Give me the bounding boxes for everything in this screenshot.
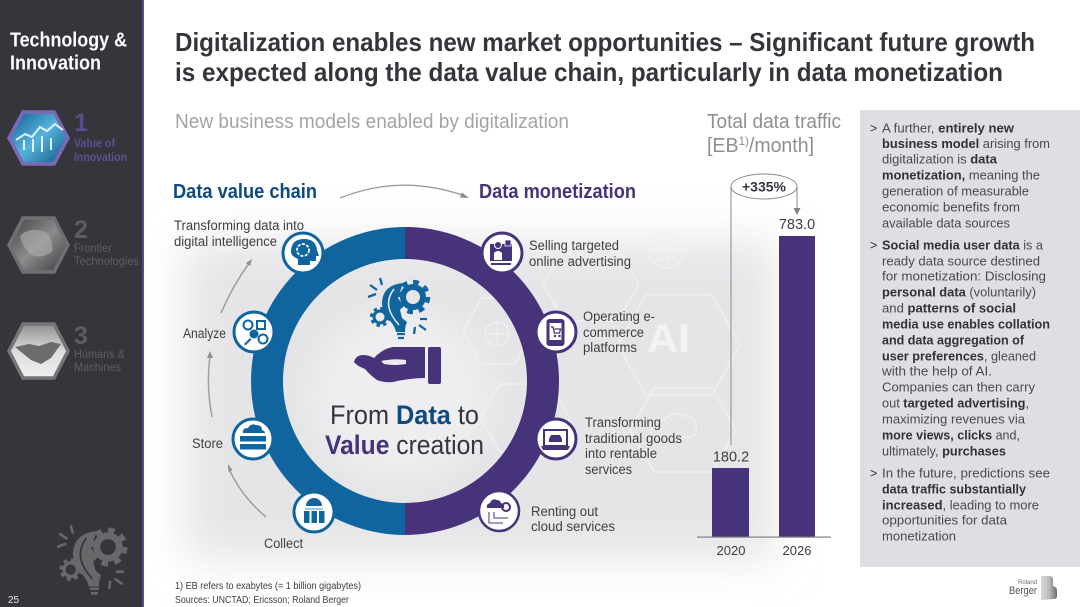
arrow: chain to monetization — [340, 185, 469, 198]
labels: value chain steps: Store — [192, 436, 223, 451]
icon: central bulb and gears — [354, 278, 441, 384]
bullet 2: ultimately, purchases — [882, 444, 1006, 458]
bullet 2: with the help of AI. — [881, 364, 992, 378]
labels: monetization routes: traditional goods — [585, 431, 682, 446]
bullet 2: personal data (voluntarily) — [882, 286, 1036, 300]
icon: central hand — [354, 347, 441, 384]
icon: rentable goods — [536, 419, 576, 459]
bullet 1: economic benefits from — [882, 200, 1020, 214]
bullet 2: ready data source destined — [882, 254, 1040, 268]
icon: e-commerce — [536, 312, 576, 352]
labels: monetization routes: platforms — [583, 340, 637, 355]
labels: monetization routes: Renting out — [531, 504, 598, 519]
arrows: value chain progress — [207, 259, 266, 517]
bullet 2: Social media user data is a — [882, 238, 1043, 252]
year labels: 2020 — [717, 543, 745, 558]
bullet 3: In the future, predictions see — [882, 466, 1050, 480]
growth arrow — [731, 187, 797, 445]
nav item 2: frontier technologies — [9, 216, 139, 272]
icon: selling advertising — [482, 233, 522, 273]
bullet 2: out targeted advertising, — [882, 396, 1029, 410]
logo: Roland Berger — [1009, 576, 1057, 600]
bullet 1 — [870, 122, 1050, 230]
bullet 2: Companies can then carry — [882, 380, 1036, 394]
nav item 1: value of innovation: Value of — [74, 136, 116, 150]
ring chart — [267, 243, 543, 519]
bullet 1: A further, entirely new — [882, 122, 1014, 136]
nav item 3: humans and machines: Humans & — [74, 347, 125, 361]
labels: monetization routes: services — [585, 462, 632, 477]
nav item 3: humans and machines: 3 — [74, 322, 88, 350]
labels: monetization routes: into rentable — [585, 446, 657, 461]
title: is expected along the data value chain, particularly in data monetization — [175, 57, 1003, 87]
bullet 2: maximizing revenues via — [882, 412, 1025, 426]
footnote and sources — [175, 581, 361, 606]
labels: value chain steps: Transforming data into — [174, 218, 304, 233]
nav item 3: humans and machines — [9, 322, 125, 378]
decorative hexagon pattern — [463, 232, 740, 472]
sidebar heading: Technology & — [10, 30, 127, 52]
labels: monetization routes: online advertising — [529, 254, 631, 269]
bullet 1: business model arising from — [882, 137, 1050, 151]
nav item 1: value of innovation — [9, 109, 127, 164]
labels: value chain steps: Collect — [264, 536, 303, 551]
bullet 2: and patterns of social — [882, 302, 1016, 316]
footnote and sources: 1) EB refers to exabytes (= 1 billion gigabytes) — [175, 581, 361, 592]
icon: analyze — [234, 312, 274, 352]
bullet 3: monetization — [882, 530, 956, 544]
labels: monetization routes: Operating e- — [583, 309, 655, 324]
title: Digitalization enables new market opportunities – Significant future growth — [175, 27, 1035, 57]
bullet 3: opportunities for data — [882, 514, 1007, 528]
bar 2020 — [712, 468, 749, 537]
bar values: 180.2 — [713, 450, 749, 466]
bullet 1: > — [870, 122, 877, 136]
subheading: data traffic: Total data traffic — [707, 111, 841, 133]
sidebar heading: Innovation — [10, 52, 101, 74]
bar chart: total data traffic: 2026 — [783, 543, 811, 558]
page number: 25 — [8, 595, 20, 606]
bullet 2: for monetization: Disclosing — [882, 270, 1046, 284]
icon: collect — [294, 492, 334, 532]
center text: Value creation — [325, 430, 484, 460]
bullet 1: available data sources — [882, 216, 1010, 230]
labels: monetization routes: cloud services — [531, 519, 615, 534]
bullet 1: monetization, meaning the — [882, 168, 1040, 182]
subheading: data traffic — [707, 111, 841, 157]
bullet 2: user preferences, gleaned — [882, 350, 1036, 364]
nav item 2: frontier technologies: Technologies — [74, 254, 139, 268]
bullet 1: generation of measurable — [882, 184, 1029, 198]
bullet 3: > — [870, 466, 877, 480]
icon: sidebar bulb and gears — [57, 526, 125, 593]
bar chart: total data traffic: 783.0 — [779, 217, 815, 233]
growth bubble — [731, 174, 797, 199]
footnote and sources: Sources: UNCTAD; Ericsson; Roland Berger — [175, 595, 350, 606]
subheading: data traffic: [EB — [707, 135, 739, 157]
panel: commentary — [860, 110, 1080, 567]
labels: value chain steps — [174, 218, 304, 551]
nav item 1: value of innovation: 1 — [74, 109, 88, 137]
labels: monetization routes — [529, 238, 682, 534]
title — [175, 27, 1035, 87]
nav item 2: frontier technologies: 2 — [74, 216, 88, 244]
subheading: business models: New business models enabled by digitalization — [175, 111, 569, 133]
bullet 3 — [870, 466, 1050, 544]
bar chart: total data traffic — [697, 174, 831, 558]
labels: value chain steps: Analyze — [183, 326, 226, 341]
logo: Roland Berger: Roland — [1018, 580, 1037, 586]
background haze — [185, 240, 775, 560]
labels: monetization routes: commerce — [583, 325, 644, 340]
nav item 1: value of innovation: Innovation — [74, 150, 127, 164]
icon: transforming data — [283, 233, 323, 273]
bullet 2: media use enables collation — [882, 318, 1050, 332]
heading: data value chain: Data value chain — [173, 181, 317, 203]
center text: From Data to — [330, 400, 479, 430]
labels: monetization routes: Transforming — [585, 415, 661, 430]
heading: data monetization: Data monetization — [479, 181, 636, 203]
bar 2026 — [779, 236, 815, 537]
sidebar heading — [10, 30, 127, 74]
icon: cloud services — [479, 491, 519, 531]
bullet 2: more views, clicks and, — [882, 428, 1020, 442]
bullet 3: increased, leading to more — [882, 498, 1039, 512]
center text — [325, 400, 484, 460]
AI watermark: AI — [647, 317, 690, 361]
logo: Roland Berger: Berger — [1009, 585, 1037, 597]
bullet 3: data traffic substantially — [882, 482, 1026, 496]
labels: value chain steps: digital intelligence — [174, 234, 277, 249]
subheading: data traffic: 1) — [738, 134, 749, 148]
sidebar — [0, 0, 144, 607]
nav item 3: humans and machines: Machines — [74, 360, 121, 374]
bullet 1: digitalization is data — [882, 152, 998, 166]
bullet 2: > — [870, 238, 877, 252]
subheading: data traffic: /month] — [749, 135, 814, 157]
nav item 2: frontier technologies: Frontier — [74, 241, 112, 255]
labels: monetization routes: Selling targeted — [529, 238, 619, 253]
bar chart: total data traffic: +335% — [742, 178, 787, 194]
bullet 2: and data aggregation of — [882, 334, 1025, 348]
bullet 2 — [870, 238, 1050, 458]
icon: store — [233, 419, 273, 459]
